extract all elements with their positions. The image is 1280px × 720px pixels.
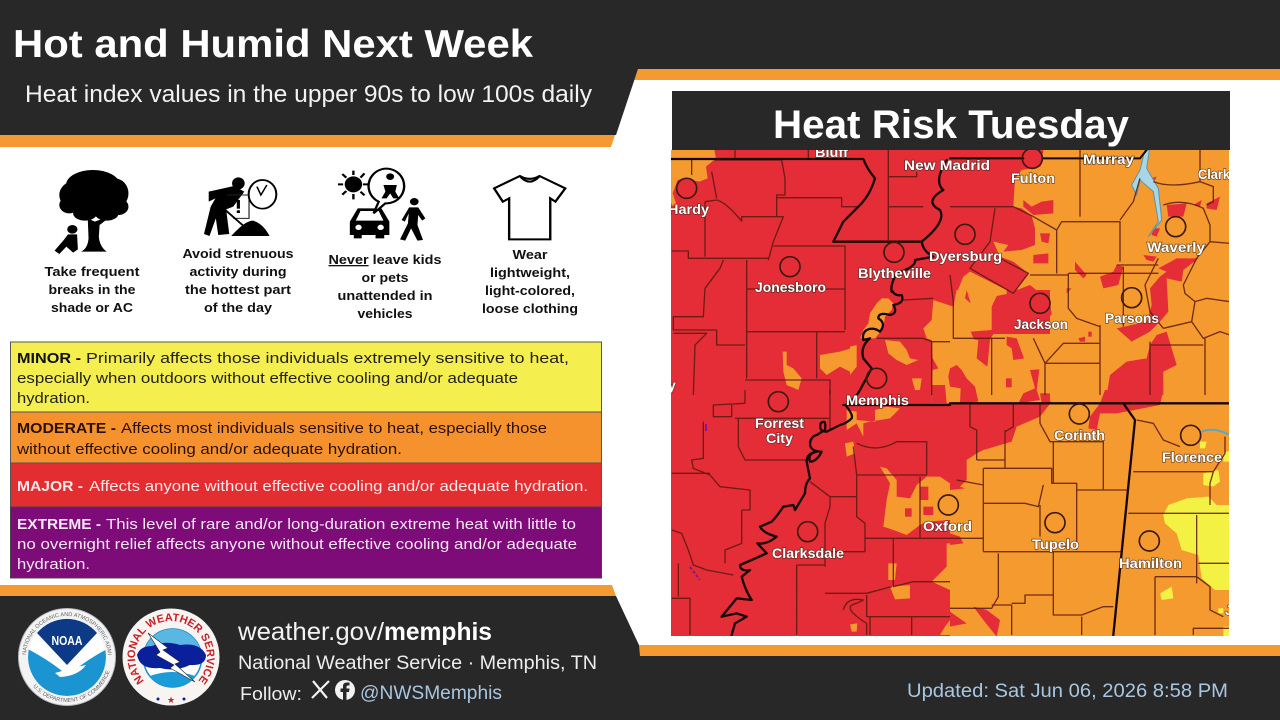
safety tips icons row <box>44 169 578 321</box>
map: heat risk <box>668 144 1233 637</box>
map: county boundaries <box>672 150 1230 635</box>
tip: never leave kids: or pets <box>362 270 408 285</box>
map: city labels: Fulton <box>1011 170 1055 186</box>
logo: National Weather Service: ★ <box>167 695 175 705</box>
logo: NOAA <box>18 608 116 706</box>
map: city labels: City <box>766 430 793 446</box>
legend: minor: Primarily affects those individuals extremely sensitive to heat, <box>86 350 569 367</box>
tip: wear light clothing: loose clothing <box>482 301 578 316</box>
legend: minor: hydration. <box>17 390 90 407</box>
tip: avoid strenuous activity <box>182 246 294 315</box>
legend: major: MAJOR - <box>17 478 83 495</box>
map: city labels: New Madrid <box>904 157 990 173</box>
tip: shade <box>44 264 140 315</box>
legend: extreme <box>10 507 602 578</box>
logo: NOAA: NOAA <box>52 633 83 648</box>
logo: National Weather Service: NATIONAL WEATHER SERVICE <box>127 613 215 685</box>
map: city labels: Forrest <box>755 415 804 431</box>
subtitle: Heat index values in the upper 90s to low 100s daily <box>25 81 592 108</box>
header band <box>0 0 1280 147</box>
icon: t-shirt <box>494 176 565 239</box>
tip: avoid strenuous activity: activity during <box>190 264 287 279</box>
footer contact text: @NWSMemphis <box>360 683 502 704</box>
map: city labels: Blytheville <box>858 265 931 281</box>
tip: shade: breaks in the <box>48 282 136 297</box>
tip: wear light clothing: lightweight, <box>490 265 570 280</box>
map: risk detail north of the Memphis state line <box>850 290 1050 403</box>
footer contact text: Follow: <box>240 684 302 704</box>
legend: moderate: Affects most individuals sensitive to heat, especially those <box>121 420 547 437</box>
map: city markers <box>677 148 1201 551</box>
map: state lines and Mississippi River <box>672 150 1230 635</box>
map: city labels: Bluff <box>815 144 848 160</box>
legend: moderate: MODERATE - <box>17 420 116 437</box>
logo: NOAA: U.S. DEPARTMENT OF COMMERCE <box>34 670 110 702</box>
title: Hot and Humid Next Week <box>13 23 533 66</box>
tip: wear light clothing: light-colored, <box>485 283 575 298</box>
map: city labels: Hamilton <box>1119 555 1182 571</box>
map heading bar <box>672 91 1230 150</box>
tip: never leave kids: unattended in <box>338 288 433 303</box>
footer band <box>0 585 1280 720</box>
tip: wear light clothing: Wear <box>512 247 548 262</box>
map: city labels: Hardy <box>668 201 709 217</box>
tip: avoid strenuous activity: Avoid strenuous <box>182 246 294 261</box>
updated timestamp: Updated: Sat Jun 06, 2026 8:58 PM <box>907 681 1228 702</box>
map: city labels: Florence <box>1162 449 1222 465</box>
map: city labels: Clark <box>1198 166 1230 182</box>
map: city labels: Oxford <box>923 518 972 534</box>
map: city labels: Waverly <box>1147 239 1205 255</box>
map: city labels: Clarksdale <box>772 545 844 561</box>
icon: Facebook <box>335 680 355 700</box>
tip: never leave kids <box>328 252 442 321</box>
map: city labels: y <box>668 377 676 393</box>
icon: child in car with sun and walker <box>338 169 425 241</box>
logo: NOAA: NATIONAL OCEANIC AND ATMOSPHERIC ADMINISTRATION <box>22 612 112 655</box>
map: city labels: J <box>1225 602 1233 618</box>
footer contact text: National Weather Service · Memphis, TN <box>238 653 597 674</box>
map: city labels: Memphis <box>846 392 909 408</box>
map: city labels: Dyersburg <box>929 248 1002 264</box>
map: city labels: Parsons <box>1105 310 1159 326</box>
legend: moderate <box>10 412 602 463</box>
footer contact text: memphis <box>384 618 492 646</box>
legend: extreme: hydration. <box>17 556 90 573</box>
map: minor risk area <box>1160 442 1230 637</box>
map: red patches over moderate area <box>905 150 1220 637</box>
footer contact text <box>237 618 597 704</box>
tip: never leave kids: vehicles <box>358 306 412 321</box>
map: purple spots <box>690 424 706 580</box>
map heading bar: Heat Risk Tuesday <box>773 103 1130 147</box>
legend: moderate: without effective cooling and/or adequate hydration. <box>16 441 402 458</box>
heat risk legend <box>10 342 602 578</box>
tip: avoid strenuous activity: the hottest part <box>185 282 292 297</box>
tip: never leave kids: Never leave kids <box>328 252 442 267</box>
legend: major: Affects anyone without effective cooling and/or adequate hydration. <box>89 478 588 495</box>
legend: extreme: EXTREME - <box>17 516 101 533</box>
legend: extreme: no overnight relief affects anyone without effective cooling and/or adequate <box>17 536 577 553</box>
tip: shade: Take frequent <box>44 264 140 279</box>
legend: minor <box>10 342 602 412</box>
map base: major risk area <box>671 150 950 636</box>
tip: wear light clothing <box>482 247 578 316</box>
icon: X <box>312 681 329 698</box>
legend: extreme: This level of rare and/or long-duration extreme heat with little to <box>106 516 576 533</box>
legend: minor: especially when outdoors without effective cooling and/or adequate <box>17 370 518 387</box>
legend: minor: MINOR - <box>17 350 81 367</box>
map: city labels: Tupelo <box>1032 536 1079 552</box>
map: city labels: Corinth <box>1054 427 1105 443</box>
icon: worker shoveling with clock <box>204 177 276 236</box>
map: city labels <box>668 144 1233 618</box>
map: moderate risk area <box>671 150 1230 636</box>
map: city labels: Jonesboro <box>755 279 826 295</box>
map: lake and river water <box>1132 150 1230 435</box>
tip: shade: shade or AC <box>51 300 134 315</box>
icon: tree and seated person <box>55 170 128 254</box>
legend: major <box>10 463 602 507</box>
tip: avoid strenuous activity: of the day <box>204 300 273 315</box>
footer contact text: weather.gov/ <box>237 618 384 646</box>
map: city labels: Jackson <box>1014 316 1068 332</box>
map: city labels: Murray <box>1083 151 1134 167</box>
